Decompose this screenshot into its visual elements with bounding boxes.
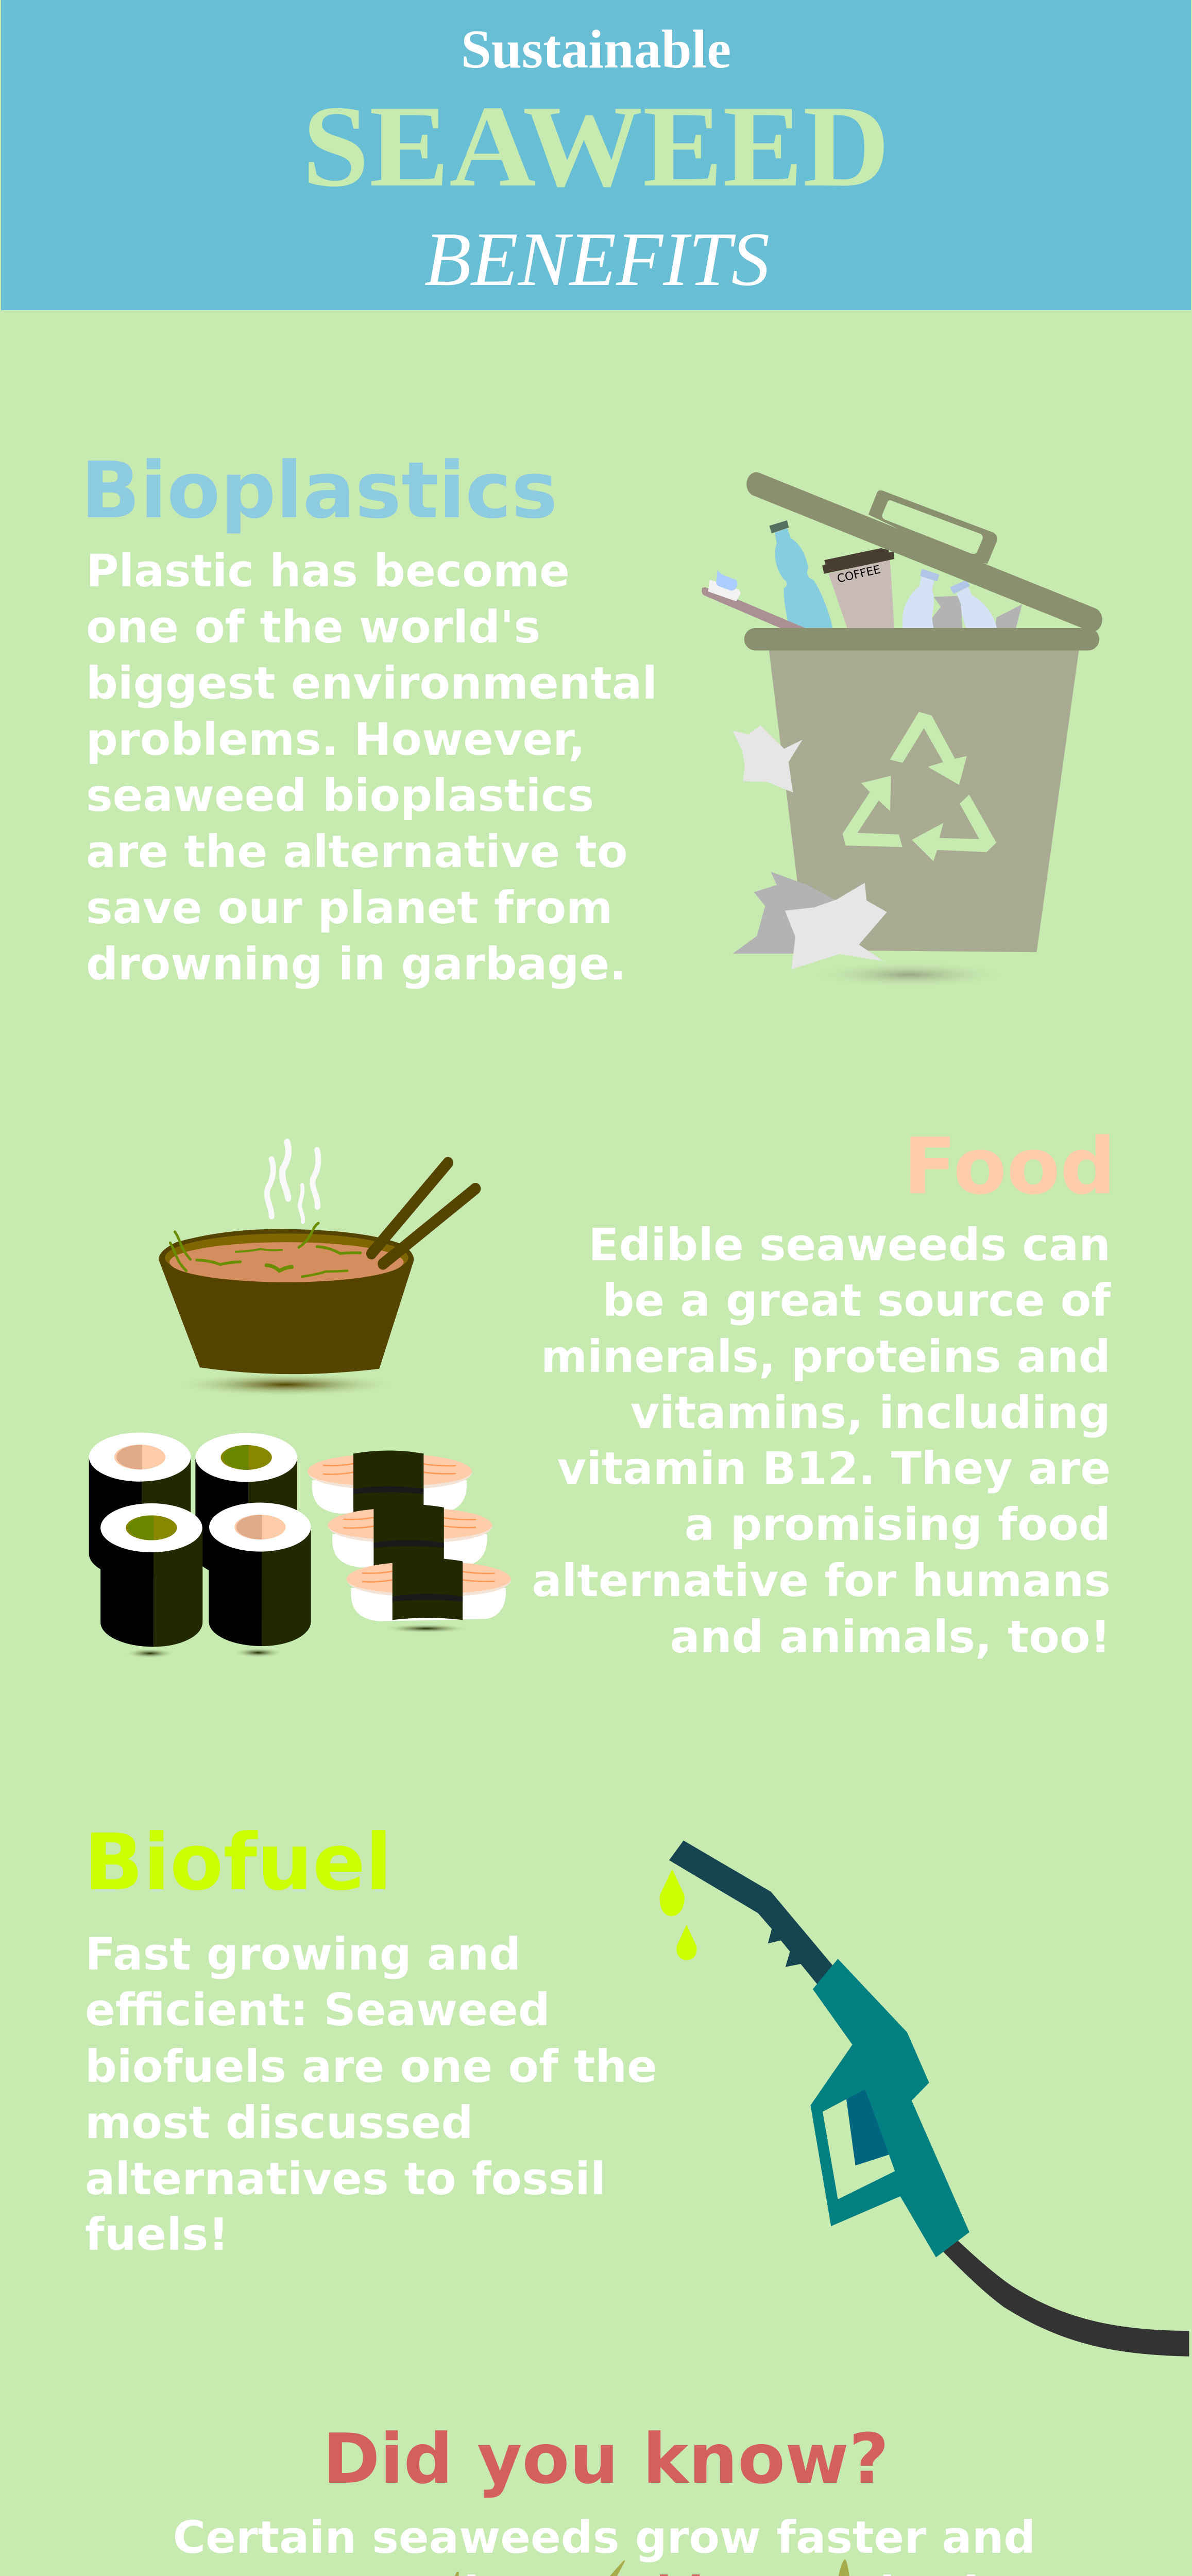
panel: biofuel [84, 1817, 1189, 2357]
text block: bioplastics: biggest environmental [86, 658, 657, 709]
text block: biofuel: biofuels are one of the [85, 2041, 657, 2093]
heading: Biofuel: Biofuel [84, 1817, 392, 1908]
text block: bioplastics: one of the world's [86, 602, 540, 653]
panel: bioplastics [81, 445, 1099, 990]
text block: food: Edible seaweeds can [588, 1219, 1111, 1271]
text block: biofuel: fuels! [85, 2209, 229, 2261]
icon: sushi rolls [89, 1433, 311, 1658]
text block: biofuel: alternatives to fossil [85, 2154, 606, 2205]
text block: biofuel: most discussed [85, 2097, 473, 2149]
heading: Food: Food [903, 1121, 1116, 1212]
text block: food: and animals, too! [670, 1612, 1111, 1663]
title: Sustainable: Sustainable [461, 19, 731, 79]
text block: bioplastics: Plastic has become [86, 546, 570, 597]
title: SEAWEED: SEAWEED [302, 82, 890, 211]
text block: biofuel: efficient: Seaweed [85, 1985, 550, 2036]
text block: bioplastics: problems. However, [86, 714, 585, 766]
icon: trash can with rubbish [702, 484, 1099, 988]
label: coffee: COFFEE [836, 563, 882, 586]
panel: did you know [173, 2419, 1035, 2576]
icon: fuel nozzle with drops [660, 1840, 1189, 2357]
heading: Did you know?: Did you know? [322, 2419, 889, 2499]
text block: bioplastics: are the alternative to [86, 826, 627, 878]
text block: did you know: Certain seaweeds grow faster and [173, 2512, 1035, 2564]
text block: bioplastics: save our planet from [86, 883, 613, 934]
text block: food: alternative for humans [532, 1555, 1111, 1607]
title: BENEFITS: BENEFITS [424, 217, 770, 302]
text block: food: minerals, proteins and [541, 1331, 1111, 1383]
text block: food: vitamin B12. They are [557, 1443, 1111, 1495]
illustration: underwater seaweed scene [41, 2560, 1151, 2576]
panel: food [89, 1121, 1116, 1663]
text block: bioplastics: seaweed bioplastics [86, 770, 594, 822]
header banner [1, 0, 1191, 310]
text block: food: vitamins, including [631, 1387, 1111, 1439]
icon: nigiri sushi [308, 1450, 511, 1633]
text block: food: be a great source of [602, 1275, 1111, 1327]
text block: food: a promising food [685, 1499, 1111, 1551]
tall kelp seaweed [408, 2560, 1105, 2576]
icon: soup bowl with chopsticks [159, 1142, 475, 1396]
heading: Bioplastics: Bioplastics [81, 445, 558, 536]
text block: biofuel: Fast growing and [85, 1929, 521, 1980]
text block: bioplastics: drowning in garbage. [86, 939, 626, 990]
